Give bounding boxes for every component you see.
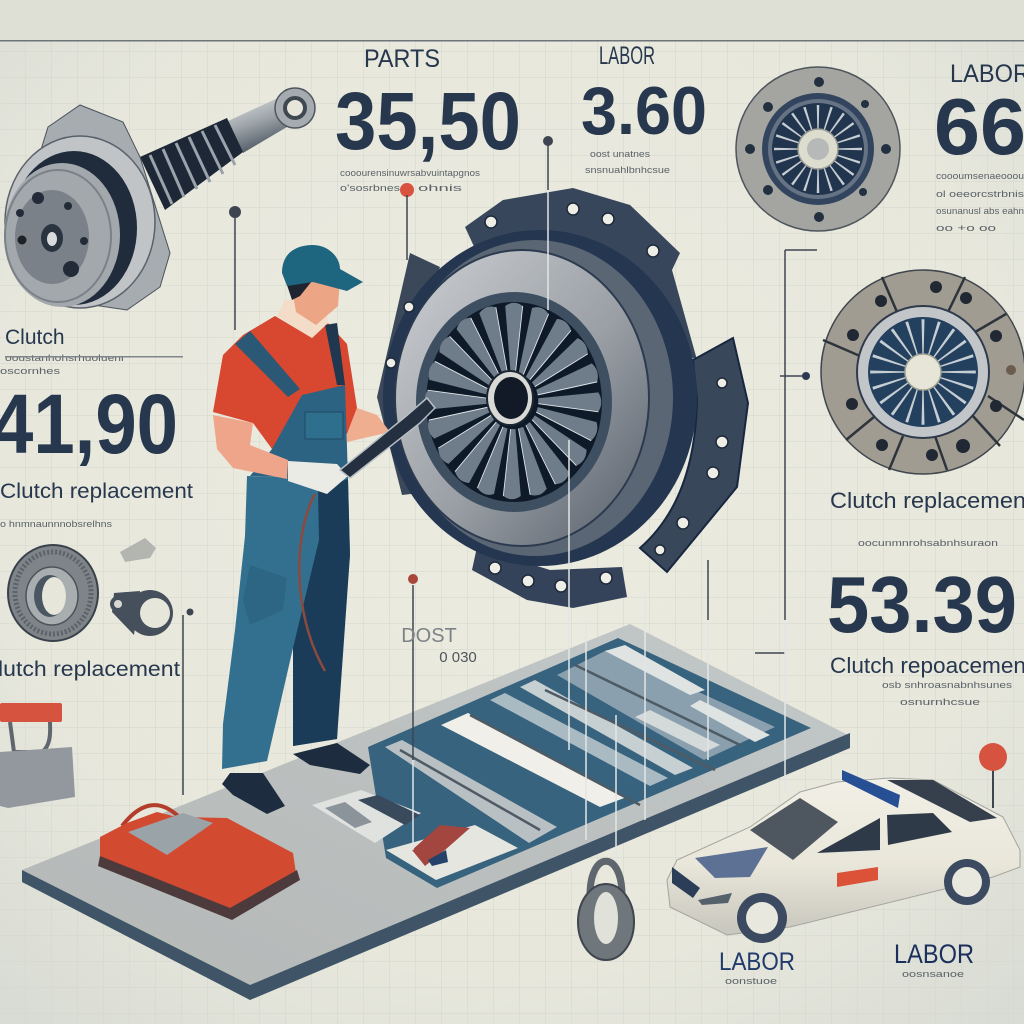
red label [837, 867, 878, 887]
heading: labor cost right: ol oeeorcstrbnis [936, 189, 1024, 200]
wrench [340, 398, 435, 478]
dark panel [368, 638, 811, 888]
spring [140, 118, 243, 210]
headlight [698, 893, 732, 905]
pocket [243, 565, 287, 625]
text: right clutch replacement: Clutch replacemen [830, 488, 1024, 513]
grille [672, 867, 700, 898]
body [667, 778, 1020, 935]
white sheet [386, 825, 518, 880]
text: clutch label left: Clutch [5, 326, 65, 349]
text: left lower clutch replacement: lutch replacement [0, 658, 180, 681]
heading: parts cost: cooourensinuwrsabvuintapgnos [340, 168, 480, 179]
text: right price: 53.39 [827, 560, 1017, 649]
heading: parts cost: PARTS [364, 45, 440, 73]
fine print right: oocunmnrohsabnhsuraon [858, 538, 998, 549]
icon: red tool bag [98, 805, 300, 920]
small sheet [312, 790, 421, 843]
rear window [887, 780, 997, 822]
rod and eye [228, 88, 315, 153]
big clutch assembly [377, 188, 748, 608]
icon: car location pin [979, 743, 1007, 808]
text: cost callout [401, 625, 477, 666]
pants [222, 476, 350, 769]
fine print right: osb snhroasnabnhsunes [882, 680, 1012, 691]
arm [213, 415, 288, 479]
diaphragm opening [426, 302, 602, 502]
strips [385, 645, 775, 843]
face [290, 278, 340, 325]
red shirt [213, 316, 357, 449]
heading: labor cost right: oo +o oo [936, 223, 996, 234]
bottom flange [472, 547, 627, 608]
diaphragm fingers [425, 303, 601, 499]
fine print under car [725, 969, 964, 987]
text: cost callout: DOST [401, 625, 457, 647]
heading: parts cost: ohnis [418, 183, 462, 194]
mechanic [213, 245, 435, 814]
cap [282, 245, 363, 291]
mini icons [412, 825, 470, 866]
heading: labor cost right: 66 [934, 82, 1024, 171]
neck [277, 300, 328, 338]
icon: padlock bag with tag [0, 703, 75, 808]
heading: labor cost: 3.60 [581, 73, 707, 149]
hair [286, 281, 312, 300]
air hose [299, 494, 325, 671]
text: left clutch replacement: Clutch replacement [0, 480, 193, 503]
heading: labor cost right: osunanusl abs eahn [936, 206, 1024, 217]
text: cost callout: 0 030 [439, 649, 477, 666]
light bar [842, 770, 900, 808]
heading: labor cost right [934, 60, 1024, 234]
housing [10, 105, 170, 310]
heading: labor cost: snsnuahlbnhcsue [585, 165, 670, 176]
windshield [750, 798, 838, 860]
glove [288, 461, 348, 494]
icon: release bearing and spring rod [4, 88, 315, 310]
heading: labor cost right: coooumsenaeooou [936, 171, 1024, 182]
heading: labor cost [581, 42, 707, 176]
fine print right [858, 538, 1012, 708]
flange bolts [386, 203, 728, 592]
shoes [222, 743, 370, 814]
left flange [377, 253, 440, 495]
hub [487, 371, 533, 425]
bib and straps [235, 323, 348, 479]
text: right clutch label: Clutch repoacemen [830, 653, 1024, 678]
icon: smudge above ring [120, 538, 156, 562]
icon: large right clutch disc [821, 270, 1024, 474]
heading: labor cost: oost unatnes [590, 149, 650, 160]
text: labor under car left: LABOR [719, 948, 795, 976]
text: left price: ooustanhohsrhuoluenr [5, 353, 125, 364]
fine print under car: oonstuoe [725, 976, 777, 987]
icon: padlock [578, 861, 634, 960]
heading: labor cost: LABOR [599, 42, 655, 70]
fine print under car: oosnsanoe [902, 969, 964, 980]
top flange [465, 188, 697, 360]
heading: parts cost: 35,50 [335, 76, 521, 167]
text: labor under car right: LABOR [894, 939, 974, 969]
icon: washer [8, 545, 98, 641]
platform with cost sheet [22, 624, 850, 1000]
hood graphic [695, 847, 768, 878]
wheels [737, 859, 990, 943]
icon: small clutch disc [736, 67, 900, 231]
fine print under left text: o hnmnaunnnobsrelhns [0, 519, 112, 530]
pressure plate ring [395, 250, 649, 546]
forearm right [347, 408, 390, 442]
icon: ring [110, 590, 173, 636]
callout pins and leader lines [183, 136, 817, 875]
body [383, 230, 697, 566]
right flange [640, 338, 748, 572]
fine print right: osnurnhcsue [900, 697, 980, 708]
icon: car [667, 770, 1020, 943]
heading: parts cost: o'sosrbnes [340, 183, 400, 194]
side windows [817, 813, 952, 853]
heading: parts cost [335, 45, 521, 197]
text: left price: oscornhes [0, 366, 60, 377]
